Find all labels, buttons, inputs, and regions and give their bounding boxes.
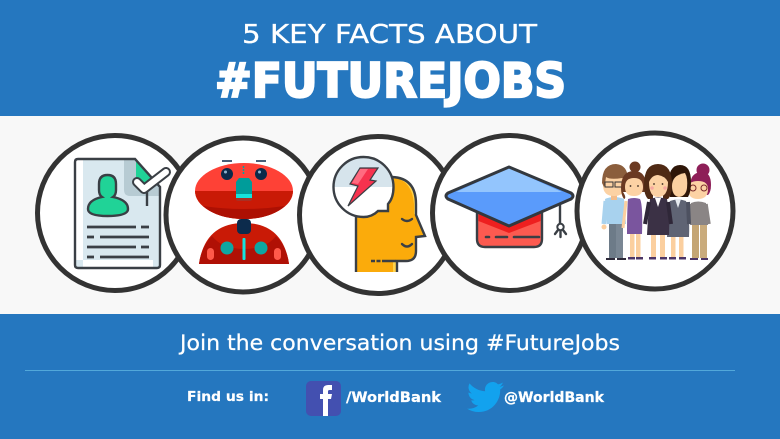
person 4: woman in grey suit — [667, 165, 691, 260]
panel: icon band — [0, 116, 780, 314]
icon: twitter bird — [467, 382, 504, 412]
circle icon: group of five people — [577, 133, 733, 289]
circle icon: robot — [166, 138, 320, 292]
circle icon: graduation cap — [432, 136, 588, 290]
twitter handle: @WorldBank — [504, 390, 605, 406]
panel: header band — [0, 0, 780, 116]
facebook handle: /WorldBank — [346, 390, 442, 406]
person 2: woman in purple dress — [621, 162, 646, 260]
title line: #FutureJobs: #FUTUREJOBS — [215, 54, 566, 109]
call to action text: Join the conversation using #FutureJobs — [178, 331, 620, 355]
person 3: woman in dark suit — [644, 164, 672, 260]
circle icon: head with lightning thought — [300, 136, 456, 294]
label: find us in: Find us in: — [187, 390, 269, 405]
person 5: woman with glasses and bun — [688, 164, 711, 260]
panel: footer band — [0, 314, 780, 439]
person 1: man with glasses — [602, 164, 628, 260]
icon: facebook — [306, 381, 341, 416]
title line: 5 key facts about: 5 KEY FACTS ABOUT — [242, 20, 537, 50]
circle icon: resume document — [38, 136, 192, 290]
